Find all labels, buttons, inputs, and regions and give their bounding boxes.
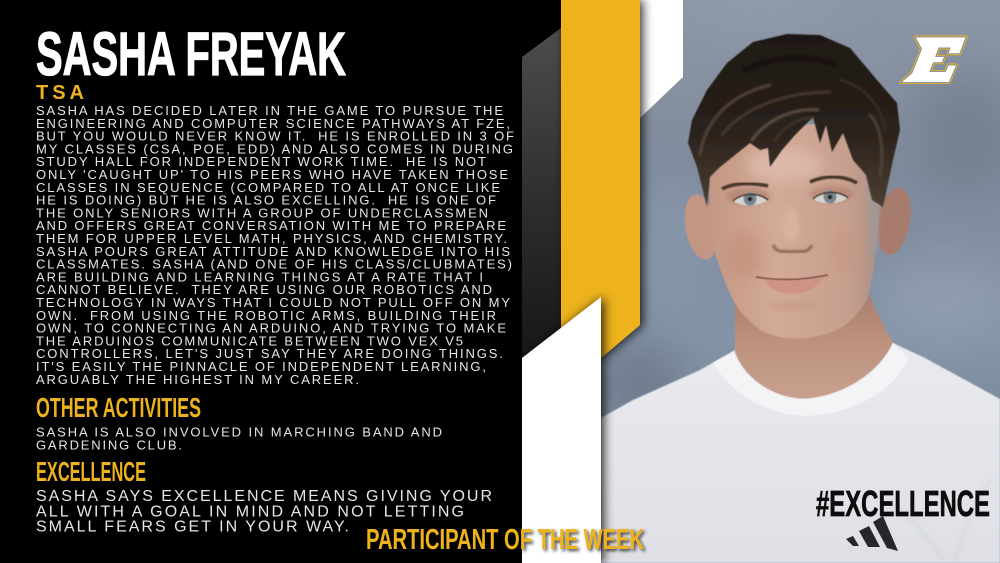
hair strands xyxy=(700,58,885,175)
main biography text: OWN. FROM USING THE ROBOTIC ARMS, BUILDING THEIR xyxy=(36,308,496,323)
heading: other activities: OTHER ACTIVITIES xyxy=(36,392,201,423)
main biography text: SASHA HAS DECIDED LATER IN THE GAME TO PURSUE THE xyxy=(36,103,503,118)
main biography text: THEM FOR UPPER LEVEL MATH, PHYSICS, AND CHEMISTRY. xyxy=(36,231,507,246)
excellence text: SASHA SAYS EXCELLENCE MEANS GIVING YOUR xyxy=(36,488,492,505)
main biography text: ARGUABLY THE HIGHEST IN MY CAREER. xyxy=(36,372,359,387)
main biography text: CLASSMATES. SASHA (AND ONE OF HIS CLASS/CLUBMATES) xyxy=(36,257,512,272)
eye sockets xyxy=(726,188,770,204)
portrait photo xyxy=(600,0,1000,563)
face shading xyxy=(726,149,880,311)
lower white stripe xyxy=(522,297,601,563)
shirt xyxy=(601,343,1000,563)
right cheek shadow xyxy=(868,189,880,256)
excellence text: ALL WITH A GOAL IN MIND AND NOT LETTING xyxy=(36,503,464,520)
excellence text: SMALL FEARS GET IN YOUR WAY. xyxy=(36,519,349,536)
hair xyxy=(688,34,900,207)
main biography text: ONLY 'CAUGHT UP' TO HIS PEERS WHO HAVE TAKEN THOSE xyxy=(36,167,508,182)
main biography text: OWN, TO CONNECTING AN ARDUINO, AND TRYING TO MAKE xyxy=(36,321,506,336)
main biography text: CANNOT BELIEVE. THEY ARE USING OUR ROBOTICS AND xyxy=(36,282,492,297)
studio backdrop xyxy=(601,0,1000,563)
main biography text: THE ARDUINOS COMMUNICATE BETWEEN TWO VEX V5 xyxy=(36,333,463,348)
right eyebrow xyxy=(810,177,857,183)
left eye xyxy=(733,192,768,206)
main biography text: TECHNOLOGY IN WAYS THAT I COULD NOT PULL OFF ON MY xyxy=(36,295,510,310)
other activities text xyxy=(36,425,442,452)
main biography text: SASHA POURS GREAT ATTITUDE AND KNOWLEDGE INTO HIS xyxy=(36,244,510,259)
main biography text: BUT YOU WOULD NEVER KNOW IT. HE IS ENROLLED IN 3 OF xyxy=(36,129,514,144)
main biography text: STUDY HALL FOR INDEPENDENT WORK TIME. HE IS NOT xyxy=(36,154,486,169)
heading: excellence: EXCELLENCE xyxy=(36,456,146,487)
cheek tones xyxy=(733,236,761,274)
main biography text: CLASSES IN SEQUENCE (COMPARED TO ALL AT ONCE LIKE xyxy=(36,180,500,195)
collar xyxy=(713,343,908,416)
mouth xyxy=(756,275,828,294)
other activities text: SASHA IS ALSO INVOLVED IN MARCHING BAND AND xyxy=(36,425,442,440)
other activities text: GARDENING CLUB. xyxy=(36,437,182,452)
left eyebrow xyxy=(722,184,768,189)
chin shadow xyxy=(776,303,809,309)
dark angled stripe xyxy=(522,28,561,375)
main biography text: IT'S EASILY THE PINNACLE OF INDEPENDENT LEARNING, xyxy=(36,359,486,374)
shirt folds xyxy=(890,480,990,563)
gold stripe xyxy=(561,0,640,358)
excellence text xyxy=(36,488,492,536)
main biography text xyxy=(36,103,514,387)
face xyxy=(709,120,882,338)
main biography text: THE ONLY SENIORS WITH A GROUP OF UNDERCLASSMEN xyxy=(36,205,488,220)
main biography text: HE IS DOING) BUT HE IS ALSO EXCELLING. HE IS ONE OF xyxy=(36,193,496,208)
title: name: SASHA FREYAK xyxy=(36,20,346,88)
main biography text: AND OFFERS GREAT CONVERSATION WITH ME TO PREPARE xyxy=(36,218,506,233)
main biography text: ENGINEERING AND COMPUTER SCIENCE PATHWAYS AT FZE, xyxy=(36,116,510,131)
icon: school E logo xyxy=(901,37,966,83)
right eye xyxy=(813,190,848,204)
main biography text: CONTROLLERS, LET'S JUST SAY THEY ARE DOING THINGS. xyxy=(36,346,503,361)
icon: adidas logo xyxy=(846,516,898,551)
main biography text: MY CLASSES (CSA, POE, EDD) AND ALSO COMES IN DURING xyxy=(36,141,513,156)
right ear xyxy=(878,187,912,255)
forehead highlight xyxy=(747,149,823,181)
neck xyxy=(735,290,893,399)
backdrop mottling xyxy=(605,78,1000,410)
main biography text: ARE BUILDING AND LEARNING THINGS AT A RATE THAT I xyxy=(36,269,483,284)
activity label: TSA: TSA xyxy=(36,82,84,104)
left ear xyxy=(684,194,715,260)
upper white stripe xyxy=(640,0,683,118)
nose bridge highlight xyxy=(786,210,798,240)
banner: participant of the week: PARTICIPANT OF THE WEEK xyxy=(366,524,644,556)
nose xyxy=(773,245,812,252)
